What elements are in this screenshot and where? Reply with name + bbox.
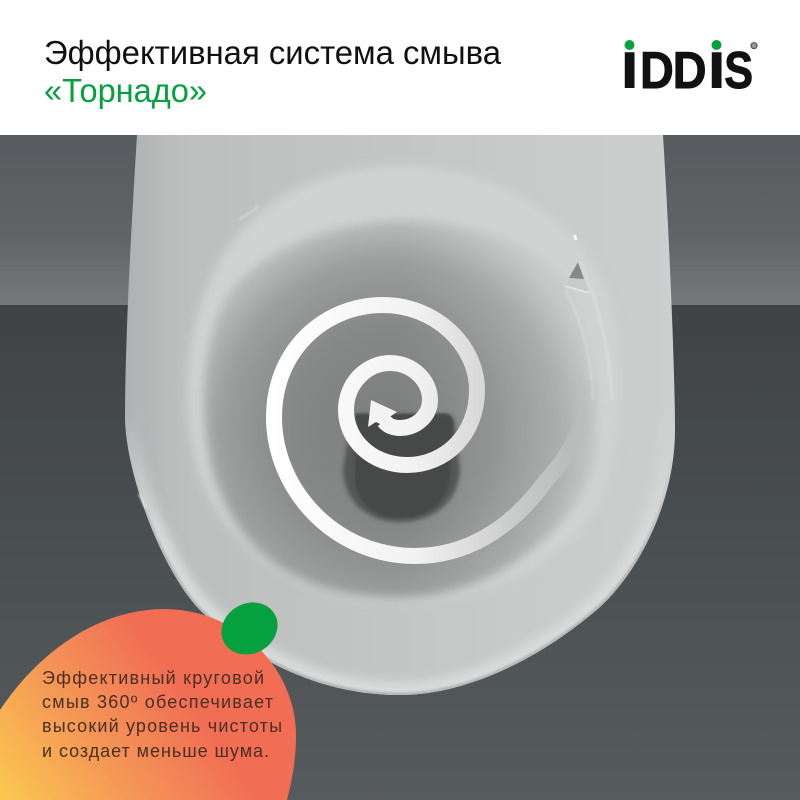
callout text: смыв 360º обеспечивает <box>42 692 273 712</box>
rim highlight <box>126 434 675 695</box>
glare highlights <box>139 206 259 508</box>
logo: IDDIS: D <box>673 42 706 100</box>
tornado spiral arrow <box>274 305 592 556</box>
callout text: высокий уровень чистоты <box>42 716 282 736</box>
toilet bowl photo <box>125 135 675 695</box>
flush nozzle <box>565 234 593 398</box>
green accent dot <box>212 592 287 665</box>
light inner band <box>186 168 576 584</box>
toilet outer body <box>125 135 675 695</box>
logo: IDDIS: S <box>724 42 753 100</box>
arrowhead <box>368 400 397 430</box>
logo: IDDIS <box>620 40 757 100</box>
bowl interior <box>204 220 598 598</box>
logo: IDDIS: I <box>707 41 726 99</box>
callout blob <box>0 609 296 800</box>
header panel <box>0 0 800 135</box>
logo: IDDIS: I <box>620 41 639 99</box>
callout text: Эффективный круговой <box>42 668 264 688</box>
callout text: и создает меньше шума. <box>42 741 269 761</box>
drain hole <box>343 414 460 522</box>
title: «Торнадо» <box>44 72 207 109</box>
logo: IDDIS: D <box>640 42 674 100</box>
title: Эффективная система смыва <box>44 34 502 71</box>
